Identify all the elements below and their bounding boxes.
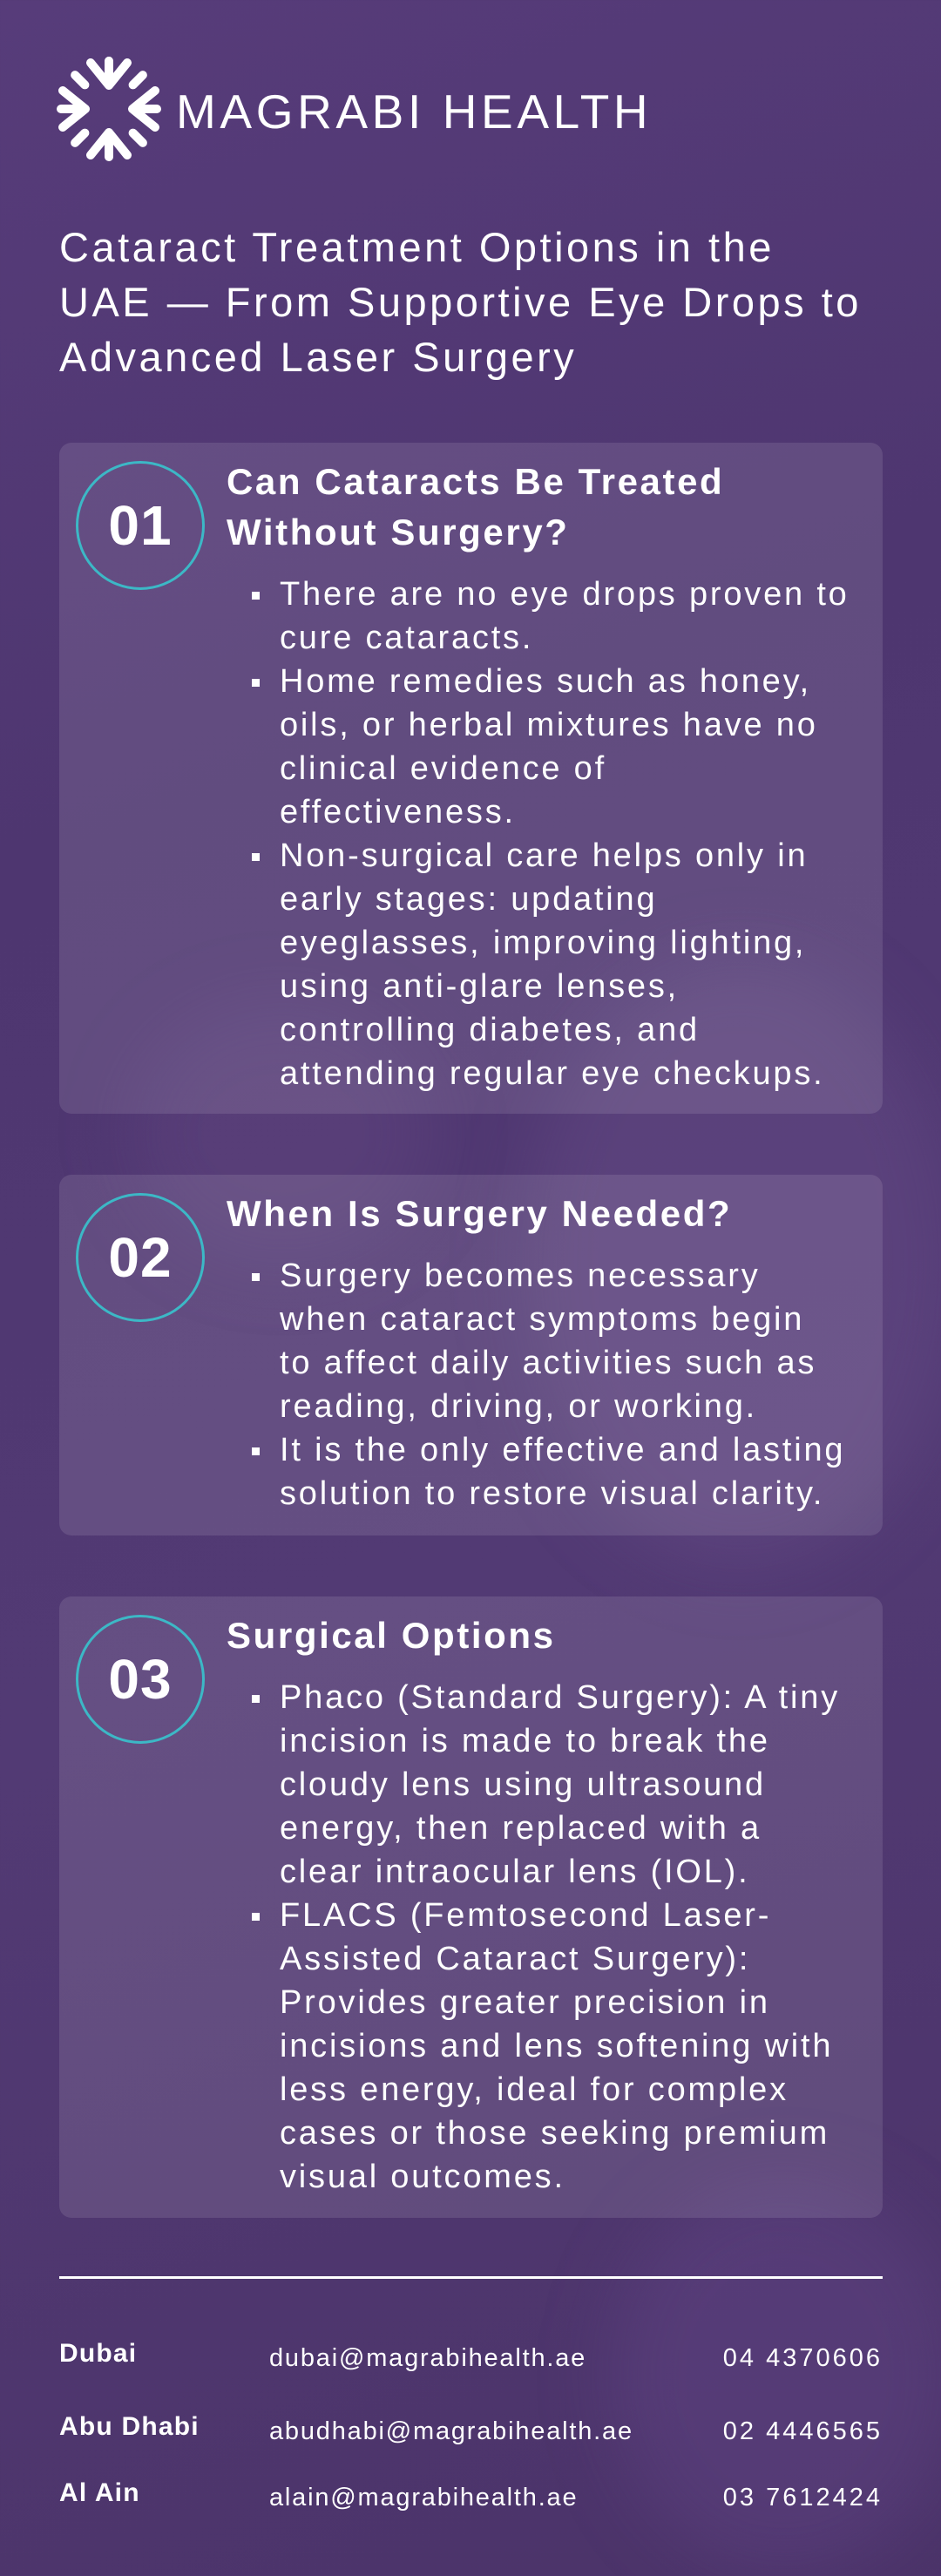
contact row: Dubai: Dubai	[59, 2339, 137, 2368]
title: UAE — From Supportive Eye Drops to	[59, 279, 862, 325]
heading 02: When Is Surgery Needed?	[227, 1193, 732, 1234]
bullets 02: to affect daily activities such as	[280, 1345, 816, 1381]
bullets 01: Non-surgical care helps only in	[280, 837, 808, 874]
bullets 01: clinical evidence of	[280, 750, 606, 787]
number badge 03	[76, 1615, 205, 1744]
contact row: Abu Dhabi: Abu Dhabi	[59, 2412, 200, 2441]
number badge 01	[76, 461, 205, 590]
title: Advanced Laser Surgery	[59, 334, 577, 380]
bullets 02: It is the only effective and lasting	[280, 1432, 845, 1468]
contact row: Dubai	[59, 2339, 883, 2372]
contact row: Al Ain: 03 7612424	[723, 2484, 883, 2512]
bullets 03: energy, then replaced with a	[280, 1810, 762, 1847]
bullets 02: Surgery becomes necessary	[280, 1257, 761, 1294]
heading 01	[227, 461, 724, 552]
number badge 03: 03	[108, 1648, 173, 1711]
contact row: Al Ain: alain@magrabihealth.ae	[269, 2484, 578, 2512]
bullets 01: controlling diabetes, and	[280, 1012, 700, 1048]
bullets 01: cure cataracts.	[280, 620, 533, 656]
bullets 01: using anti-glare lenses,	[280, 968, 679, 1005]
number badge 02: 02	[108, 1226, 173, 1289]
bullets 03: clear intraocular lens (IOL).	[280, 1854, 749, 1890]
panel: 03	[59, 1596, 883, 2218]
bullets 03: Phaco (Standard Surgery): A tiny	[280, 1679, 840, 1716]
title: Cataract Treatment Options in the	[59, 224, 775, 270]
panel: 02	[59, 1175, 883, 1535]
number badge 02	[76, 1193, 205, 1322]
heading 01: Can Cataracts Be Treated	[227, 461, 724, 502]
heading 03: Surgical Options	[227, 1615, 556, 1656]
bullets 03: incisions and lens softening with	[280, 2028, 833, 2064]
bullets 02: solution to restore visual clarity.	[280, 1475, 824, 1512]
brand name: MAGRABI HEALTH	[176, 85, 652, 139]
bullets 03: cloudy lens using ultrasound	[280, 1766, 766, 1803]
panel: 01	[59, 443, 883, 1114]
bullets 03	[252, 1679, 840, 2195]
bullets 01: attending regular eye checkups.	[280, 1055, 824, 1092]
logo	[57, 57, 652, 161]
bullets 01: Home remedies such as honey,	[280, 663, 811, 700]
title	[59, 224, 862, 380]
contact row: Al Ain: Al Ain	[59, 2478, 140, 2507]
bullets 01: eyeglasses, improving lighting,	[280, 925, 806, 961]
bullets 01: oils, or herbal mixtures have no	[280, 707, 818, 743]
bullets 01: effectiveness.	[280, 794, 516, 830]
contact row: Abu Dhabi	[59, 2412, 883, 2445]
bullets 01: early stages: updating	[280, 881, 657, 918]
bullets 03: Provides greater precision in	[280, 1984, 770, 2021]
contact row: Al Ain	[59, 2478, 883, 2512]
bullets 03: less energy, ideal for complex	[280, 2071, 789, 2108]
bullets 03: cases or those seeking premium	[280, 2115, 829, 2152]
bullets 02: when cataract symptoms begin	[280, 1301, 804, 1338]
bullets 01	[252, 576, 850, 1092]
bullets 01: There are no eye drops proven to	[280, 576, 850, 613]
number badge 01: 01	[108, 494, 173, 557]
contact row: Dubai: 04 4370606	[723, 2344, 883, 2372]
bullets 03: Assisted Cataract Surgery):	[280, 1941, 750, 1977]
bullets 02: reading, driving, or working.	[280, 1388, 757, 1425]
bullets 03: FLACS (Femtosecond Laser-	[280, 1897, 771, 1934]
contact row: Dubai: dubai@magrabihealth.ae	[269, 2344, 586, 2372]
contact row: Abu Dhabi: abudhabi@magrabihealth.ae	[269, 2417, 633, 2445]
bullets 03: visual outcomes.	[280, 2159, 565, 2195]
heading 01: Without Surgery?	[227, 512, 570, 552]
bullets 03: incision is made to break the	[280, 1723, 770, 1759]
contact row: Abu Dhabi: 02 4446565	[723, 2417, 883, 2445]
icon: logo mark	[57, 57, 161, 161]
bullets 02	[252, 1257, 845, 1512]
